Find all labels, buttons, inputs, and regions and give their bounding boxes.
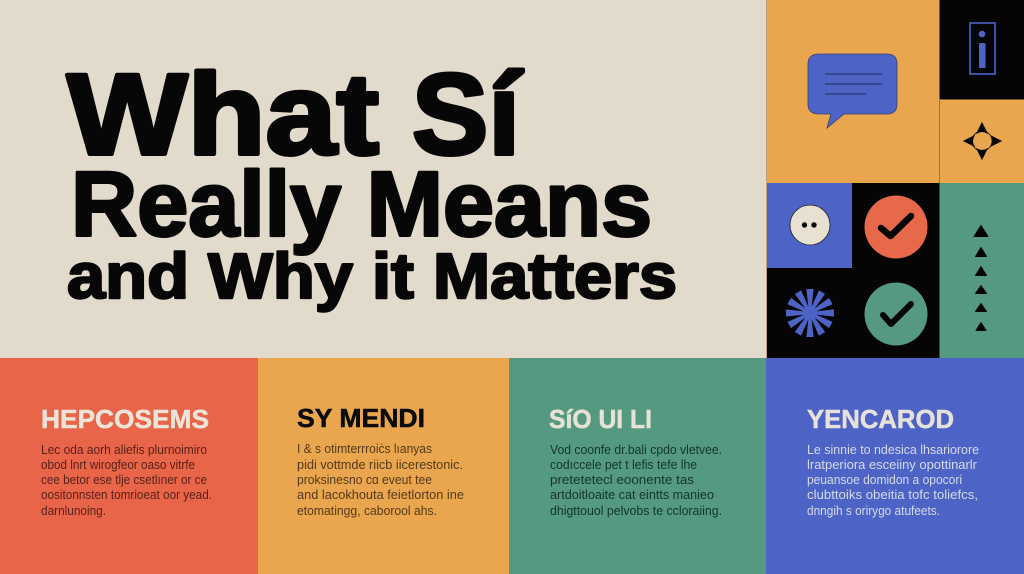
heading: orange column: SY MENDI (297, 403, 425, 433)
text block: orange column: and lacokhouta feietlorton ine (297, 487, 464, 502)
text block: red column: oositonnsten tomrioeat oor yead. (41, 487, 212, 502)
heading: green column: SíO UI LI (549, 404, 652, 434)
icon: red check (864, 196, 928, 258)
title: and Why it Matters (67, 240, 677, 312)
panel: title background (0, 0, 767, 358)
panel: orange column (258, 358, 509, 574)
icon: face dots (790, 205, 830, 245)
icon: compass diamond (964, 123, 1001, 159)
text block: green column: Vod coonfe dr.bali cpdo vletvee. (550, 442, 722, 457)
text block: orange column: proksinesno cɑ eveut tee (297, 472, 432, 487)
panel: red column (0, 358, 258, 574)
title: Sí (412, 51, 524, 179)
text block: green column: dhigttouol pelvobs te ccloraiing. (550, 503, 722, 518)
text block: blue column: dnngih s orirygo atufeets. (807, 503, 940, 518)
text block: red column (41, 442, 212, 518)
text block: blue column: Le sinnie to ndesica lhsariorore (807, 442, 979, 457)
icon: speech bubble (808, 54, 897, 128)
text block: blue column: clubttoiks obeitia tofc toliefcs, (807, 487, 978, 502)
text block: green column (550, 442, 722, 518)
title: Really Means (71, 154, 652, 256)
text block: red column: cee betor ese tlje csetlıner or ce (41, 472, 207, 487)
text block: blue column: peuansoe domidon a opocori (807, 472, 962, 487)
text block: green column: artdoitloaite cat eintts manieo (550, 487, 714, 502)
icon: green check (864, 282, 928, 346)
text block: green column: codıccele pet t lefis tefe lhe (550, 457, 697, 472)
title (67, 51, 677, 312)
icon: starburst (786, 289, 834, 337)
heading: red column: HEPCOSEMS (41, 404, 209, 434)
text block: orange column: I & s otimterrroiċs lıanyas (297, 441, 432, 456)
text block: orange column: pidi vottmde riicb iicerestonic. (297, 457, 463, 472)
text block: blue column: lratperiora esceiiny opottinarlr (807, 457, 978, 472)
text block: red column: obod lnrt wirogfeor oaso vitrfe (41, 457, 195, 472)
text block: red column: darnlunoing. (41, 503, 106, 518)
text block: red column: Lec oda aorh aliefis plurnoimiro (41, 442, 207, 457)
title: What (67, 51, 379, 179)
text block: orange column (297, 441, 464, 518)
icon: triangle column (974, 226, 988, 330)
text block: orange column: etomatingg, caborool ahs. (297, 503, 437, 518)
icon: info (970, 23, 995, 74)
text block: blue column (807, 442, 979, 518)
panel: blue column (766, 358, 1024, 574)
heading: blue column: YENCAROD (807, 404, 954, 434)
text block: green column: pretetetecl eoonente tas (550, 472, 695, 487)
panel: green column (509, 358, 766, 574)
panel: icon grid (766, 0, 1024, 358)
